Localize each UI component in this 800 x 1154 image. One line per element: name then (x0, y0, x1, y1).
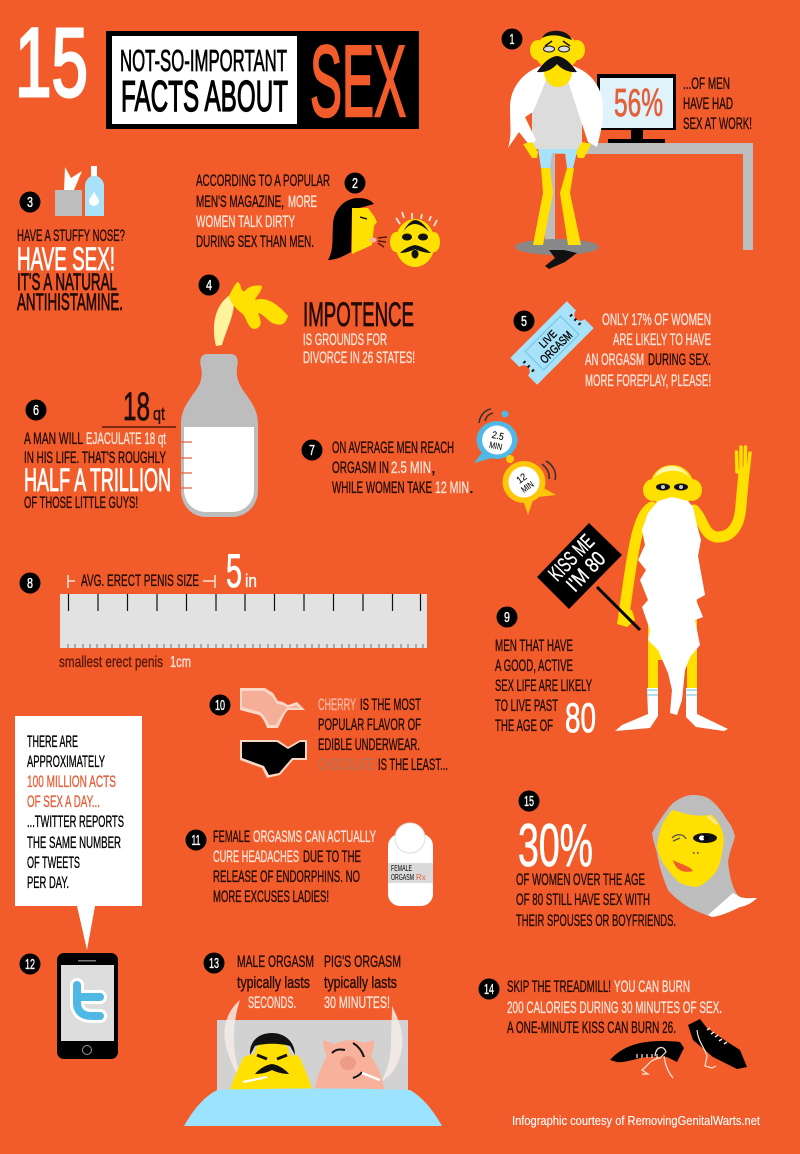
text: half a trillion: IN HIS LIFE. THAT'S ROUGHLY (24, 448, 166, 467)
text: male duration (237, 952, 314, 1012)
badge 15 (518, 790, 540, 812)
title (15, 8, 419, 138)
text: flavors: CHERRY (318, 695, 356, 714)
text: dirty talk (196, 171, 330, 251)
sign: kiss me: I'M 80 (562, 547, 610, 596)
text: half a trillion: HALF A TRILLION (24, 462, 171, 498)
badge 15: 15 (524, 793, 534, 810)
text: impotence: DIVORCE IN 26 STATES! (303, 348, 415, 367)
text: calories: YOU CAN BURN (614, 977, 690, 996)
panel: fact 7 (302, 409, 556, 515)
text: minutes: ORGASM IN (332, 458, 389, 477)
text: 17 percent: ARE LIKELY TO HAVE (613, 330, 711, 349)
sign: kiss me (537, 523, 640, 630)
icon: pink underwear (240, 688, 305, 728)
title: FACTS ABOUT (121, 72, 288, 121)
icon: yellow clock: 12 (515, 472, 530, 487)
text: headaches: CURE HEADACHES (213, 847, 299, 866)
badge 2: 2 (352, 175, 358, 192)
badge 9: 9 (504, 609, 510, 626)
text: impotence: IMPOTENCE (303, 296, 414, 334)
badge 5: 5 (521, 313, 527, 330)
text: 17 percent (585, 310, 711, 390)
icon: monitor (597, 74, 676, 143)
text: dirty talk: MORE (288, 192, 317, 211)
text: flavors (318, 695, 448, 774)
badge 6: 6 (33, 402, 39, 419)
text: half a trillion: OF THOSE LITTLE GUYS! (24, 493, 138, 512)
text: pig duration (324, 952, 401, 1012)
panel: fact 8 (20, 544, 427, 671)
credit: Infographic courtesy of RemovingGenitalWarts.net (512, 1113, 760, 1128)
text: male duration: typically lasts (237, 973, 310, 992)
text: live past 80: THE AGE OF (495, 716, 553, 735)
text: headaches: RELEASE OF ENDORPHINS. NO (213, 867, 360, 886)
icon: yellow clock: MIN (519, 479, 536, 495)
panel: fact 14 (478, 977, 747, 1078)
text: headaches: FEMALE (213, 827, 250, 846)
badge 3 (20, 192, 40, 212)
text: 30 percent: 30% (518, 812, 593, 879)
callout: THE SAME NUMBER (27, 833, 121, 852)
text: calories (507, 977, 722, 1037)
text: dirty talk: DURING SEX THAN MEN. (196, 232, 314, 251)
text: pig duration: typically lasts (324, 973, 397, 992)
sign: kiss me: KISS ME (544, 530, 599, 586)
panel: fact 13 (184, 952, 442, 1126)
icon: blue clock: 2.5 (491, 430, 505, 443)
badge 3: 3 (27, 194, 33, 211)
badge 6 (26, 400, 46, 420)
text: headaches: MORE EXCUSES LADIES! (213, 887, 329, 906)
panel: fact 10 (210, 688, 448, 778)
text: 56 percent: SEX AT WORK! (683, 114, 752, 133)
text: flavors: POPULAR FLAVOR OF (318, 715, 421, 734)
text: 17 percent: AN ORGASM (585, 350, 644, 369)
text: minutes: 2.5 MIN (391, 458, 431, 477)
text: minutes (332, 438, 474, 497)
text: calories: SKIP THE TREADMILL! (507, 977, 611, 996)
panel: fact 11 (186, 823, 433, 906)
icon: desk (545, 143, 753, 250)
text: impotence (303, 296, 415, 367)
text: 18 quarts (102, 385, 176, 429)
text: have sex: HAVE SEX! (17, 241, 115, 277)
text: minutes: , (431, 458, 436, 477)
callout (15, 716, 142, 950)
badge 14: 14 (484, 981, 494, 998)
badge 10: 10 (215, 697, 225, 714)
badge 2 (344, 172, 366, 194)
icon: shoes (610, 1019, 747, 1078)
pig in bed (315, 1040, 384, 1090)
text: minutes: WHILE WOMEN TAKE (332, 478, 432, 497)
text: flavors: IS THE LEAST... (378, 755, 448, 774)
text: 18 quarts: 18 (123, 385, 150, 429)
badge 1 (502, 28, 522, 50)
badge 14 (478, 978, 500, 1000)
title: NOT-SO-IMPORTANT (120, 43, 287, 78)
badge 5 (514, 310, 534, 332)
callout: OF TWEETS (27, 853, 80, 872)
panel: fact 15 (516, 790, 757, 930)
text: live past 80: SEX LIFE ARE LIKELY (495, 676, 592, 695)
icon: pill bottle: Rx (416, 873, 426, 882)
icon: milk bottle (181, 354, 258, 517)
text: minutes: ON AVERAGE MEN REACH (332, 438, 454, 457)
badge 8 (20, 572, 40, 594)
panel: fact 9 (495, 447, 750, 741)
icon: ticket: ORGASM (537, 328, 575, 366)
text: 56 percent: HAVE HAD (683, 94, 733, 113)
badge 10 (210, 694, 230, 716)
callout: ...TWITTER REPORTS (27, 812, 124, 831)
text: 17 percent: ONLY 17% OF WOMEN (602, 310, 711, 329)
text: dirty talk: ACCORDING TO A POPULAR (196, 171, 330, 190)
text: minutes: 12 MIN (435, 478, 469, 497)
text: live past 80 (495, 636, 596, 741)
text: live past 80: MEN THAT HAVE (495, 636, 573, 655)
text: calories: A ONE-MINUTE KISS CAN BURN 26. (507, 1018, 676, 1037)
text: half a trillion (24, 429, 171, 512)
text: flavors: EDIBLE UNDERWEAR. (318, 735, 420, 754)
text: average size: in (245, 571, 257, 591)
text: have sex: IT'S A NATURAL (17, 269, 117, 296)
badge 9 (496, 606, 518, 628)
text: smallest size: smallest erect penis (59, 654, 163, 671)
text: male duration: SECONDS. (248, 993, 296, 1012)
text: half a trillion: A MAN WILL (24, 429, 83, 448)
text: 30 percent: THEIR SPOUSES OR BOYFRIENDS. (516, 911, 676, 930)
text: average size: AVG. ERECT PENIS SIZE (81, 571, 199, 590)
text: 18 quarts: qt (153, 404, 165, 424)
panel: fact 4 (198, 274, 415, 367)
text: 56 percent (683, 74, 752, 133)
icon: pill bottle (388, 823, 433, 906)
badge 13: 13 (209, 955, 219, 972)
icon: bed scene (184, 1000, 442, 1126)
panel: fact 2 (196, 171, 440, 267)
text: 30 percent: OF 80 STILL HAVE SEX WITH (516, 890, 650, 909)
text: 30 percent (516, 812, 676, 930)
panel: fact 3 (17, 166, 125, 316)
callout: PER DAY. (27, 873, 69, 892)
icon: man listening (390, 212, 440, 267)
icon: yellow clock (502, 455, 556, 515)
text: 17 percent: DURING SEX. (648, 350, 711, 369)
icon: woman talking (328, 198, 387, 260)
icon: phone (57, 953, 118, 1059)
ruler (60, 594, 427, 648)
badge 1: 1 (510, 31, 514, 48)
badge 4 (198, 274, 220, 296)
panel: fact 6 (24, 354, 258, 517)
text: flavors: CHOCOLATE (318, 755, 375, 774)
text: half a trillion: EJACULATE 18 qt (86, 429, 166, 448)
icon: droopy spurt (214, 282, 288, 346)
badge 12 (20, 954, 40, 974)
text: average size: 5 (226, 544, 242, 597)
callout: OF SEX A DAY... (27, 792, 100, 811)
title: SEX (310, 26, 406, 138)
icon: old man (615, 447, 750, 731)
badge 7 (302, 440, 322, 460)
blanket (184, 1088, 442, 1126)
icon: black underwear (240, 740, 307, 778)
text: flavors: IS THE MOST (360, 695, 421, 714)
text: live past 80: 80 (565, 694, 596, 741)
text: 56 percent: ...OF MEN (683, 74, 730, 93)
badge 13 (204, 952, 224, 974)
text: impotence: IS GROUNDS FOR (303, 330, 387, 349)
text: have sex: ANTIHISTAMINE. (17, 289, 123, 316)
text: dirty talk: WOMEN TALK DIRTY (196, 212, 295, 231)
badge 11 (186, 830, 206, 850)
badge 4: 4 (206, 277, 212, 294)
text: headaches: DUE TO THE (303, 847, 361, 866)
text: have sex: HAVE A STUFFY NOSE? (17, 226, 125, 245)
panel: fact 12 (15, 716, 142, 1059)
man in bed (230, 1033, 312, 1090)
icon: blue clock: MIN (488, 440, 503, 452)
panel: fact 1 (502, 28, 753, 269)
text: smallest size: 1cm (170, 654, 191, 671)
text: have sex (17, 226, 125, 316)
badge 7: 7 (309, 442, 315, 459)
icon: blue clock (474, 409, 518, 463)
text: headaches: ORGASMS CAN ACTUALLY (253, 827, 376, 846)
text: minutes: . (469, 478, 474, 497)
text: dirty talk: MEN'S MAGAZINE, (196, 192, 284, 211)
callout: 100 MILLION ACTS (27, 772, 116, 791)
text: headaches (213, 827, 376, 906)
icon: ticket (510, 301, 594, 385)
icon: man in coat (508, 31, 603, 269)
icon: older woman (652, 795, 757, 917)
text: male duration: MALE ORGASM (237, 952, 314, 971)
callout: APPROXIMATELY (27, 752, 105, 771)
badge 11: 11 (192, 832, 200, 849)
text: live past 80: A GOOD, ACTIVE (495, 656, 573, 675)
icon: tissues and spray (55, 166, 104, 216)
text: pig duration: PIG'S ORGASM (324, 952, 401, 971)
icon: pill bottle: ORGASM (391, 873, 414, 882)
icon: monitor: 56% (614, 82, 663, 125)
badge 12: 12 (25, 956, 35, 973)
title: 15 (15, 8, 88, 117)
text: average size (68, 544, 257, 597)
icon: ticket: LIVE (537, 328, 560, 351)
callout: THERE ARE (27, 732, 78, 751)
panel: fact 5 (510, 301, 711, 390)
text: pig duration: 30 MINUTES! (324, 993, 390, 1012)
icon: pill bottle: FEMALE (391, 864, 412, 873)
badge 8: 8 (27, 575, 33, 592)
text: 30 percent: OF WOMEN OVER THE AGE (516, 870, 645, 889)
text: live past 80: TO LIVE PAST (495, 696, 558, 715)
